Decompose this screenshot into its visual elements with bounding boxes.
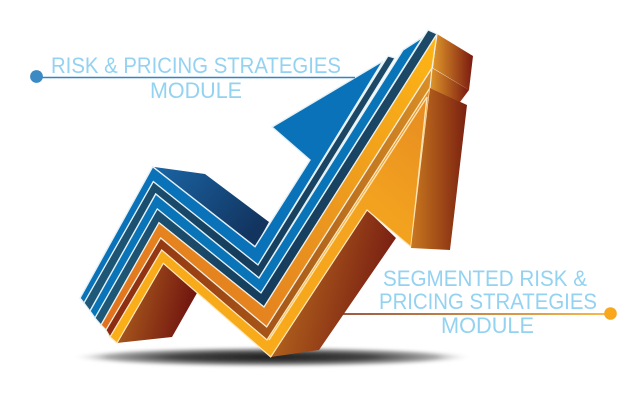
leader dot — [604, 307, 617, 320]
rising arrow graphic — [80, 30, 473, 357]
callout: segmented risk and pricing strategies module — [343, 266, 617, 338]
dark brown stripe — [106, 68, 432, 340]
dark blue stripe one — [84, 56, 395, 311]
blue band with arrowhead — [80, 61, 383, 303]
leader line — [37, 76, 355, 78]
label line two: MODULE — [150, 78, 242, 103]
yellow front band with arrowhead — [110, 88, 430, 357]
dark blue stripe two — [95, 30, 437, 325]
top side of blue band — [153, 167, 269, 247]
brown side of left peak — [117, 263, 197, 343]
leader dot — [30, 70, 43, 83]
label line three: MODULE — [441, 313, 534, 338]
callout: risk and pricing strategies module — [30, 53, 355, 103]
top end box — [433, 34, 473, 90]
right side of arrowhead — [411, 88, 467, 250]
label line two: PRICING STRATEGIES — [379, 289, 597, 314]
cream highlight on arrowhead — [269, 97, 427, 340]
middle end box — [430, 68, 469, 102]
leader line — [343, 313, 610, 315]
ground shadow — [70, 347, 474, 367]
orange band — [101, 34, 437, 330]
label line one: RISK & PRICING STRATEGIES — [51, 53, 341, 78]
label line one: SEGMENTED RISK & — [383, 266, 587, 291]
second blue band — [90, 37, 423, 318]
brown side of lower arm — [271, 210, 396, 357]
